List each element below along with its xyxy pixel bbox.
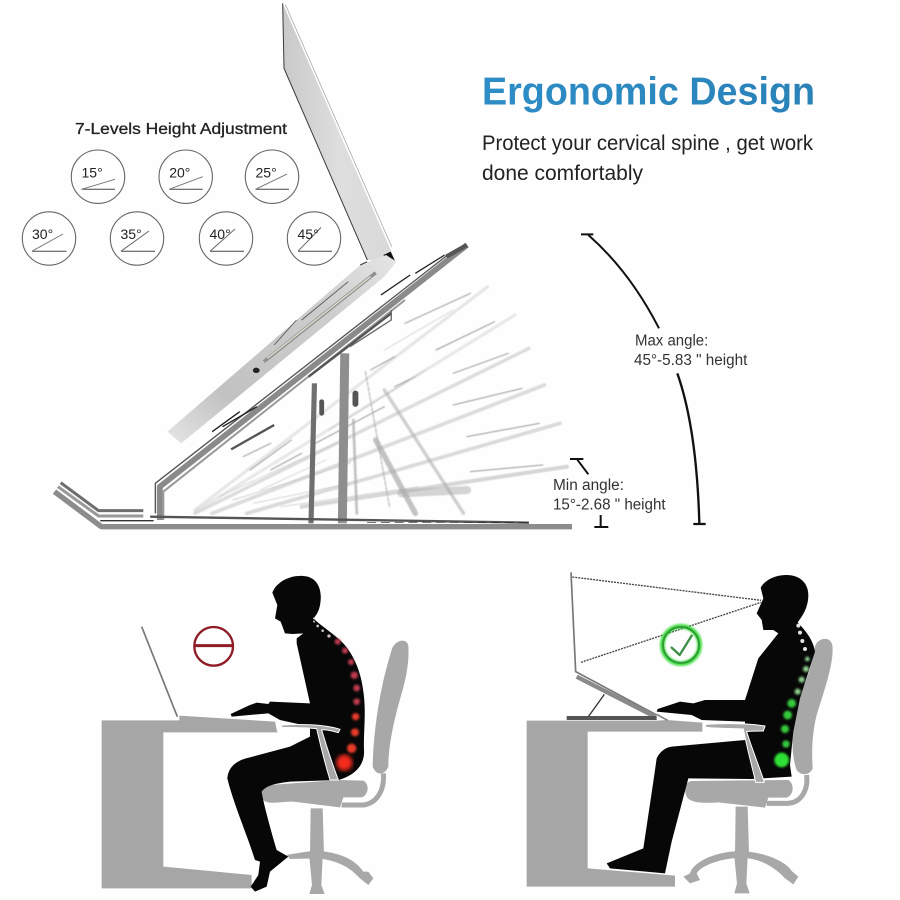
person silhouette xyxy=(607,575,815,873)
icon: 20 degrees: 20° xyxy=(169,164,190,180)
laptop stand with laptop base xyxy=(54,245,572,527)
person silhouette xyxy=(227,576,365,892)
icon: 35 degrees xyxy=(110,212,164,265)
icon: 35 degrees: 35° xyxy=(120,226,142,242)
stand feet and base xyxy=(54,483,572,527)
panel: good posture xyxy=(527,572,833,893)
icon: 30 degrees: 30° xyxy=(32,226,53,242)
sight lines xyxy=(572,577,761,662)
callout: max angle xyxy=(581,234,748,524)
no sign xyxy=(194,627,233,666)
armrest xyxy=(706,724,765,782)
stand struts and knobs xyxy=(311,353,355,523)
desk xyxy=(527,720,702,887)
callout: max angle: 45°-5.83 " height xyxy=(634,352,748,369)
desk xyxy=(102,716,277,888)
callout: min angle: 15°-2.68 " height xyxy=(553,496,666,513)
panel: bad posture xyxy=(102,576,409,894)
angle icons xyxy=(22,150,341,265)
icon: 30 degrees xyxy=(22,212,76,265)
icon: 40 degrees: 40° xyxy=(210,226,231,242)
heading: height adjustment: 7-Levels Height Adjustment xyxy=(75,121,288,138)
icon: 45 degrees xyxy=(287,212,341,265)
ghosted stand positions xyxy=(195,287,567,513)
laptop lid xyxy=(283,3,395,263)
armrest xyxy=(282,724,340,780)
stand rails xyxy=(155,245,467,520)
subtitle: Protect your cervical spine , get work xyxy=(482,132,813,155)
callout: min angle: Min angle: xyxy=(553,477,624,494)
laptop base xyxy=(167,255,396,443)
callout: max angle: Max angle: xyxy=(635,333,708,350)
laptop flat on desk xyxy=(142,627,177,717)
spine dots green xyxy=(774,624,810,767)
office chair xyxy=(683,639,833,893)
icon: 20 degrees xyxy=(159,150,212,203)
subtitle xyxy=(482,132,813,185)
icon: 15 degrees xyxy=(71,150,125,203)
icon: 25 degrees xyxy=(245,150,299,203)
raised laptop on stand xyxy=(567,572,668,720)
title: Ergonomic Design xyxy=(482,70,815,114)
icon: 15 degrees: 15° xyxy=(82,164,103,180)
spine dots red xyxy=(313,617,360,771)
icon: 40 degrees xyxy=(199,212,253,265)
icon: 25 degrees: 25° xyxy=(256,164,277,180)
subtitle: done comfortably xyxy=(482,162,643,185)
check sign xyxy=(662,626,700,664)
callout: min angle xyxy=(553,459,666,527)
icon: 45 degrees: 45° xyxy=(298,226,319,242)
office chair xyxy=(261,641,409,894)
